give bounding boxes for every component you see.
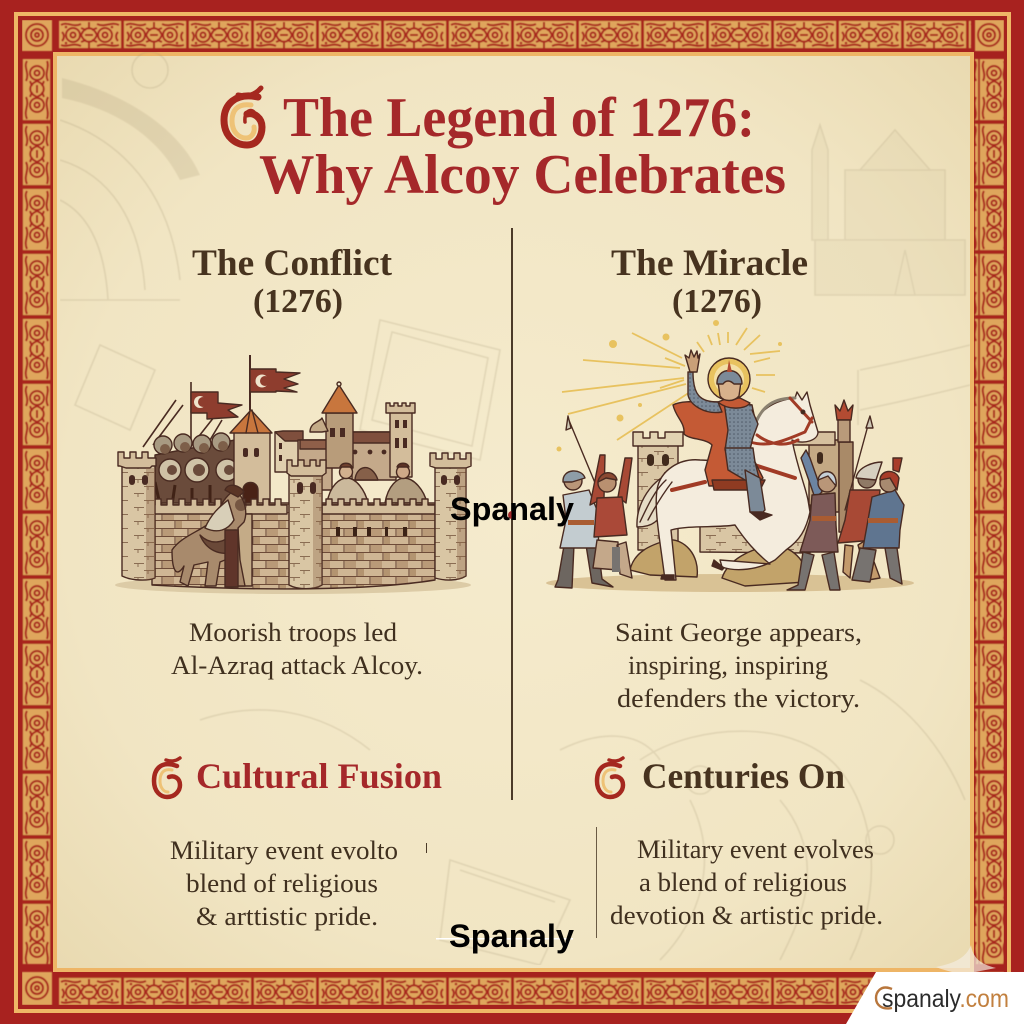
tower: rear left with orange roof bbox=[230, 410, 272, 507]
soldiers: moorish troops bbox=[154, 433, 238, 505]
text: cultural fusion description: blend of religious bbox=[186, 869, 378, 898]
warhorse bbox=[172, 485, 246, 587]
heading: cultural fusion: Cultural Fusion bbox=[196, 756, 442, 796]
heading: the miracle bbox=[611, 243, 808, 320]
text: cultural fusion description: Military event evolto bbox=[170, 836, 398, 865]
icon: centuries on ornament bbox=[597, 758, 623, 797]
text: cultural fusion description bbox=[170, 836, 398, 931]
heading: the conflict: (1276) bbox=[253, 283, 343, 320]
background castle bbox=[633, 400, 853, 553]
raised arm bbox=[688, 372, 722, 413]
head bbox=[718, 372, 741, 400]
watermark: bottom: Spanaly bbox=[449, 918, 574, 954]
defenders on the wall bbox=[327, 463, 427, 503]
logo icon bbox=[876, 988, 892, 1008]
icon: cultural fusion ornament bbox=[154, 758, 180, 797]
watermark: center: Spanaly bbox=[450, 491, 574, 527]
tower: centre bbox=[287, 460, 326, 589]
illustration: saint george on horseback bbox=[546, 320, 914, 592]
tower: right bbox=[430, 453, 471, 580]
heading: the miracle: The Miracle bbox=[611, 243, 808, 284]
logo badge bbox=[846, 972, 1024, 1024]
title line 2: Why Alcoy Celebrates bbox=[259, 144, 786, 206]
faint background sketches bbox=[60, 52, 970, 965]
text: miracle description bbox=[615, 618, 862, 713]
text: cultural fusion description: & arttistic pride. bbox=[196, 902, 378, 931]
spears bbox=[143, 382, 222, 447]
panel: the conflict bbox=[115, 243, 471, 680]
logo text: spanaly.com bbox=[882, 985, 1009, 1013]
panel: the miracle bbox=[546, 243, 914, 713]
title bbox=[224, 87, 786, 206]
soldier: right blue and skirt bbox=[787, 450, 840, 590]
cape bbox=[673, 402, 763, 486]
central divider bbox=[508, 228, 516, 800]
soldier: left cheering bbox=[590, 455, 632, 578]
torso and leg bbox=[724, 402, 756, 450]
text: miracle description: inspiring, inspiring bbox=[628, 651, 828, 680]
panel: cultural fusion bbox=[154, 756, 442, 931]
tower: left bbox=[118, 452, 156, 580]
text: centuries on description: Military event evolves bbox=[637, 835, 874, 864]
background buildings bbox=[275, 382, 415, 490]
white horse bbox=[637, 392, 818, 580]
text: miracle description: Saint George appears, bbox=[615, 618, 862, 647]
text: centuries on description: devotion & artistic pride. bbox=[610, 901, 883, 930]
panel: centuries on bbox=[597, 756, 883, 930]
text: conflict description bbox=[171, 618, 423, 680]
heading: the miracle: (1276) bbox=[672, 283, 762, 320]
sparkle bbox=[936, 945, 996, 972]
heading: the conflict bbox=[192, 243, 393, 320]
soldier: far right blue bbox=[852, 458, 904, 584]
text: centuries on description bbox=[610, 835, 883, 930]
flag: rear crescent bbox=[191, 392, 242, 419]
sun rays and stars bbox=[562, 328, 780, 440]
illustration: castle under siege bbox=[115, 355, 471, 594]
text: conflict description: Moorish troops led bbox=[189, 618, 397, 647]
soldier: right with spear bbox=[838, 416, 882, 580]
curtain wall bbox=[152, 499, 435, 589]
lower divider fragments bbox=[426, 827, 597, 940]
heading: centuries on: Centuries On bbox=[642, 756, 845, 796]
flag: top crescent bbox=[250, 355, 300, 410]
title line 1: The Legend of 1276: bbox=[283, 87, 755, 149]
heading: the conflict: The Conflict bbox=[192, 243, 393, 284]
soldier: left with spear bbox=[555, 416, 613, 588]
text: centuries on description: a blend of religious bbox=[639, 868, 847, 897]
rocks bbox=[630, 540, 807, 586]
icon: title initial ornament bbox=[224, 88, 262, 145]
text: conflict description: Al-Azraq attack Alcoy. bbox=[171, 651, 423, 680]
saint george bbox=[673, 350, 772, 520]
halo bbox=[708, 358, 750, 400]
text: miracle description: defenders the victory. bbox=[617, 684, 860, 713]
